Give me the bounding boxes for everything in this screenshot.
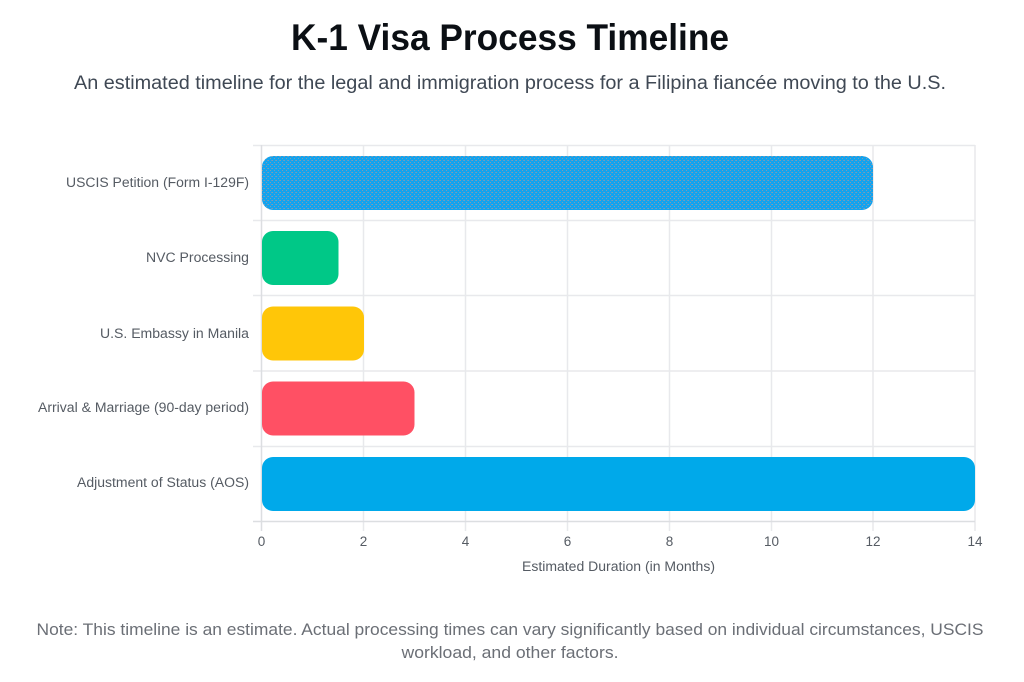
- note: Note: This timeline is an estimate. Actual processing times can vary significantly based on individual circumstances, USCIS: [36, 621, 984, 639]
- note: workload, and other factors.: [400, 644, 618, 662]
- x-axis tick labels: [258, 534, 983, 549]
- category labels: Adjustment of Status (AOS): [77, 475, 249, 490]
- x-axis tick labels: 14: [967, 534, 983, 549]
- bar: Adjustment of Status: [262, 457, 975, 511]
- category labels: Arrival & Marriage (90-day period): [38, 400, 249, 415]
- category labels: U.S. Embassy in Manila: [100, 326, 249, 341]
- x-axis tick labels: 0: [258, 534, 265, 549]
- category labels: [38, 175, 249, 490]
- bar: Arrival and Marriage: [262, 382, 414, 436]
- bar: NVC Processing: [262, 231, 338, 285]
- x-axis title: Estimated Duration (in Months): [522, 559, 715, 574]
- x-axis tick labels: 4: [462, 534, 470, 549]
- bar chart: [38, 145, 983, 574]
- x-axis tick labels: 10: [764, 534, 779, 549]
- x-axis tick labels: 8: [666, 534, 673, 549]
- x-axis tick labels: 12: [865, 534, 881, 549]
- title: K-1 Visa Process Timeline: [291, 17, 729, 58]
- x-axis tick labels: 6: [564, 534, 571, 549]
- subtitle: An estimated timeline for the legal and immigration process for a Filipina fiancée moving to the U.S.: [74, 73, 946, 94]
- x-axis tick labels: 2: [360, 534, 367, 549]
- bar: U.S. Embassy in Manila: [262, 306, 364, 360]
- category labels: USCIS Petition (Form I-129F): [66, 175, 249, 190]
- category labels: NVC Processing: [146, 250, 249, 265]
- bar: USCIS Petition: [262, 156, 873, 210]
- note: [36, 621, 984, 662]
